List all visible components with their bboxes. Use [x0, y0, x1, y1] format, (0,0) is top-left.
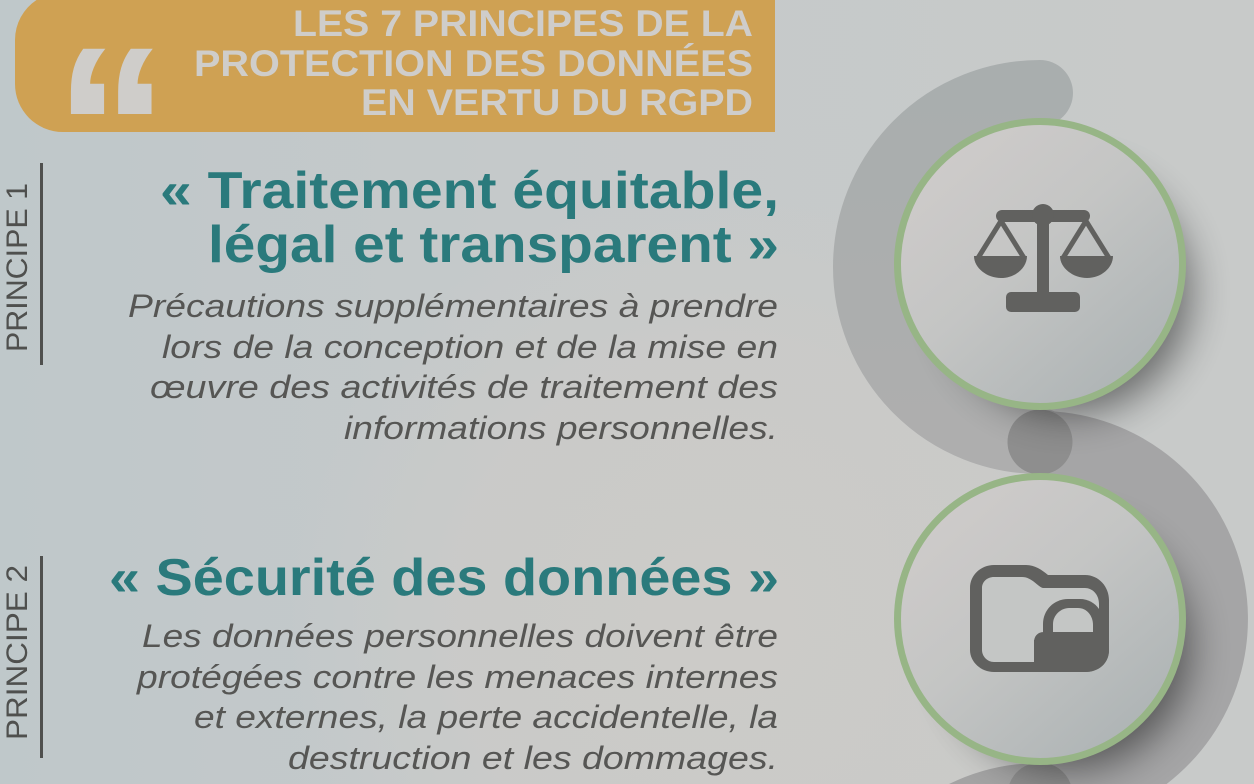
medallion: principe 2: [898, 476, 1182, 762]
icon: locked folder: [970, 565, 1109, 672]
body text: principe 1: [128, 288, 778, 446]
title text: EN VERTU DU RGPD: [361, 82, 753, 123]
disc: [898, 476, 1182, 762]
body text: principe 1: Précautions supplémentaires à prendre: [128, 288, 778, 324]
circle shadows: [946, 170, 1190, 769]
body text: principe 2: et externes, la perte accidentelle, la: [194, 699, 778, 735]
body text: principe 1: œuvre des activités de traitement des: [150, 369, 778, 405]
panel: principle 1: [1, 162, 779, 446]
serpentine ribbon: [866, 93, 1248, 784]
heading: principe 1: [160, 162, 779, 274]
side label: principe 1: [1, 163, 43, 365]
body text: principe 2: [136, 618, 778, 776]
connector dot 2: [1009, 762, 1071, 784]
icon: scales of justice: [974, 204, 1113, 312]
panel: principle 2: [1, 549, 779, 776]
side label: principe 2: PRINCIPE 2: [1, 565, 34, 740]
body text: principe 2: destruction et les dommages.: [288, 740, 778, 776]
icon: quotation mark: “: [55, 0, 168, 253]
heading: principe 1: légal et transparent »: [208, 216, 779, 274]
body text: principe 2: Les données personnelles doivent être: [142, 618, 778, 654]
panel: title banner: [15, 0, 775, 253]
side label: principe 2: [1, 556, 43, 758]
medallion: principe 1: [898, 122, 1182, 406]
body text: principe 1: informations personnelles.: [344, 410, 778, 446]
side label: principe 1: PRINCIPE 1: [1, 183, 34, 352]
disc: [898, 122, 1182, 406]
body text: principe 1: lors de la conception et de la mise en: [162, 329, 778, 365]
banner shape: [15, 0, 775, 132]
title text: PROTECTION DES DONNÉES: [194, 43, 753, 84]
heading: principe 2: « Sécurité des données »: [109, 549, 779, 607]
heading: principe 1: « Traitement équitable,: [160, 162, 779, 220]
title text: LES 7 PRINCIPES DE LA: [293, 3, 753, 44]
title text: [194, 3, 753, 123]
body text: principe 2: protégées contre les menaces internes: [136, 659, 778, 695]
connector dot 1: [1008, 410, 1072, 474]
